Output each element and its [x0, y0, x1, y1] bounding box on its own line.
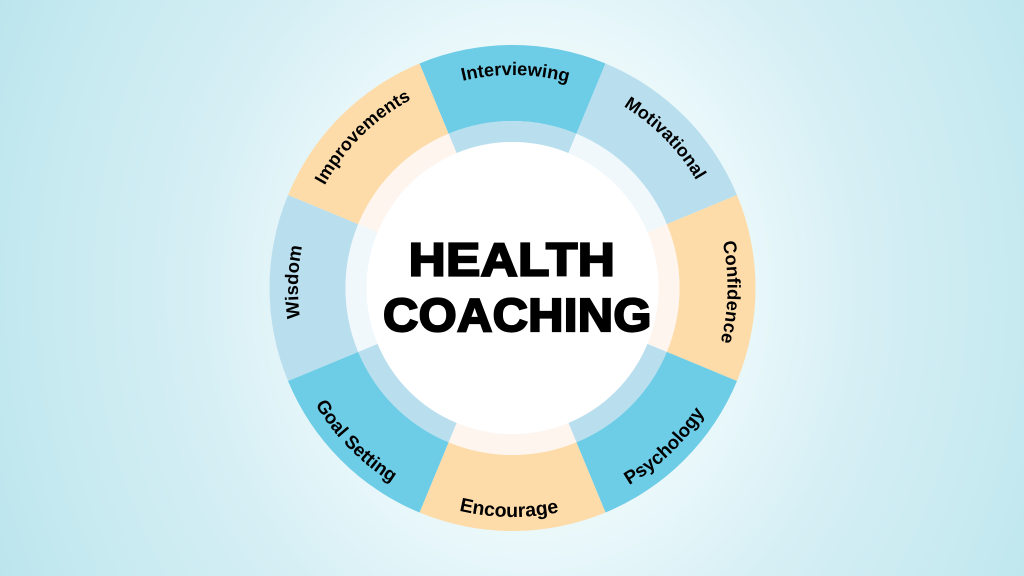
- segment: Confidence: Confidence: [722, 241, 741, 343]
- center circle: [366, 142, 658, 434]
- segment: Confidence: [648, 195, 756, 381]
- segment: Improvements: [288, 64, 456, 232]
- segment: Interviewing: Interviewing: [461, 62, 570, 85]
- segment: Psychology: [568, 344, 737, 512]
- segment: Psychology: Psychology: [623, 407, 704, 484]
- segment: Wisdom: [270, 195, 377, 381]
- title: [383, 235, 652, 342]
- segment: Encourage: Encourage: [460, 498, 558, 520]
- title: HEALTH: [409, 235, 615, 286]
- segment: Encourage: [420, 423, 606, 531]
- segment: Goal Setting: Goal Setting: [318, 400, 396, 484]
- segment: Improvements: Improvements: [314, 92, 410, 184]
- segment: Wisdom: Wisdom: [284, 246, 302, 320]
- segment: Motivational: [568, 64, 737, 224]
- title: COACHING: [383, 290, 652, 342]
- segment: Goal Setting: [288, 344, 456, 512]
- segment: Interviewing: [420, 45, 606, 153]
- health coaching wheel: [270, 45, 756, 531]
- segment: Motivational: Motivational: [624, 96, 707, 180]
